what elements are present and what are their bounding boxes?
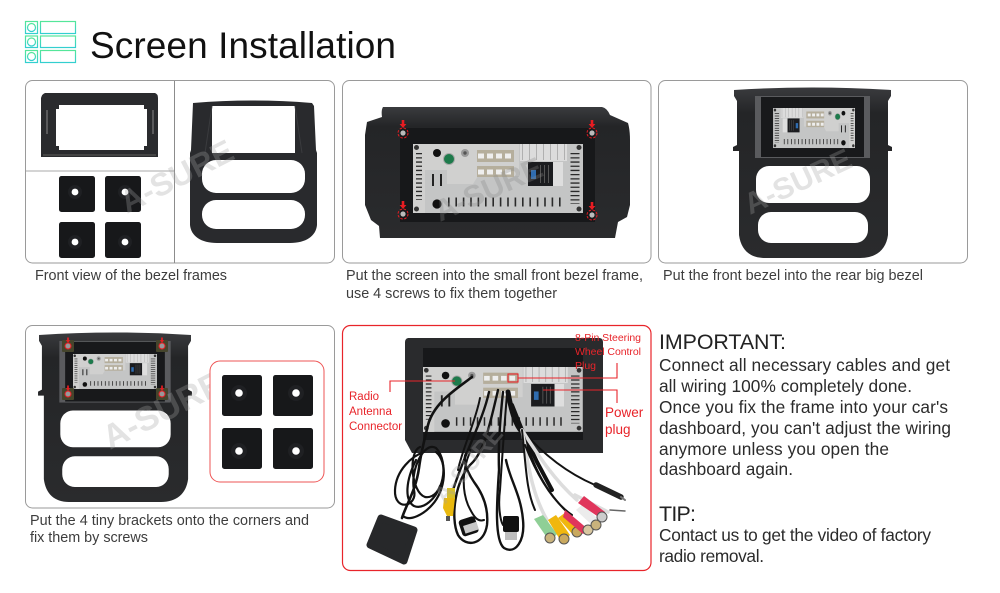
icon: GPS antenna [370,518,414,561]
text block: important [659,330,951,479]
icon: bracket top left [59,176,95,212]
caption: brackets [30,513,309,546]
icon: bezel with brackets fitted [38,332,230,502]
icon: head unit back with bezel [405,338,603,453]
icon: yellow video connector [443,488,455,521]
panel: bezel frames front view [26,80,334,263]
icon: assembled bezel rear view [733,88,892,258]
icon: bracket bottom left [59,222,95,258]
text block: tip: TIP: [659,502,696,526]
label: radio antenna: Radio [349,391,379,403]
label: steering plug: Plug [575,360,596,372]
label: power plug [605,405,644,437]
icon: bracket bottom right [105,222,141,258]
callout: four brackets [210,361,324,482]
watermark: A-SURE [429,421,509,509]
panel: wiring [342,326,651,570]
caption: screen into bezel [346,268,643,302]
label: steering plug [575,332,641,372]
icon: assembled bezel rear view: A-SURE [739,143,857,221]
title: Screen Installation [90,25,396,66]
caption: brackets: fix them by screws [30,530,148,546]
text block: important: IMPORTANT: [659,330,786,354]
icon: small front bezel [41,93,158,157]
header icon [26,22,76,62]
label: power plug: Power [605,405,644,420]
icon: bezel with brackets fitted: A-SURE [96,364,230,457]
icon: bracket top right [105,176,141,212]
icon: screen back in small bezel [365,107,630,238]
caption: screen into bezel: Put the screen into the small front bezel frame, [346,268,643,284]
text block: important: Once you fix the frame into your car's [659,397,948,417]
icon: screw top right with arrow [587,120,597,138]
text block: important: anymore unless you open the [659,439,889,459]
icon: wiring harness cables [395,377,625,550]
icon: screw top left with arrow [398,120,408,138]
label: steering plug: 8-Pin Steering [575,332,641,344]
label: radio antenna: Antenna [349,406,392,418]
icon: USB plug [458,516,479,537]
text block: important: all wiring 100% completely done. [659,376,912,396]
label: radio antenna [349,391,402,433]
panel: screen into small bezel [342,80,651,263]
text block: important: Connect all necessary cables and get [659,355,950,375]
icon: screw bottom right with arrow [587,202,597,220]
panel: front bezel into rear bezel [658,80,968,263]
label: power plug: plug [605,422,631,437]
text block: tip: Contact us to get the video of factory [659,525,931,545]
text block: tip [659,502,931,566]
label: radio antenna: Connector [349,421,402,433]
caption: brackets: Put the 4 tiny brackets onto the corners and [30,513,309,529]
text block: tip: radio removal. [659,546,764,566]
caption: rear bezel: Put the front bezel into the rear big bezel [663,268,923,284]
arrow: power plug leader [543,390,617,403]
text block: important: dashboard again. [659,459,793,479]
caption: front view: Front view of the bezel frames [35,268,227,284]
icon: screw bottom left with arrow [398,201,408,219]
caption: screen into bezel: use 4 screws to fix them together [346,286,557,302]
icon: big rear bezel [190,100,317,243]
icon: screen back in small bezel: A-SURE [429,151,548,228]
icon: HDMI plug [503,516,519,540]
watermark: A-SURE [114,132,239,220]
arrow: steering plug leader [508,363,617,382]
arrow: radio antenna leader [390,381,455,392]
text block: important: dashboard, you can't adjust the wiring [659,418,951,438]
label: steering plug: Wheel Control [575,346,641,358]
panel: tiny brackets [26,326,334,508]
icon: RCA connectors [534,496,607,544]
